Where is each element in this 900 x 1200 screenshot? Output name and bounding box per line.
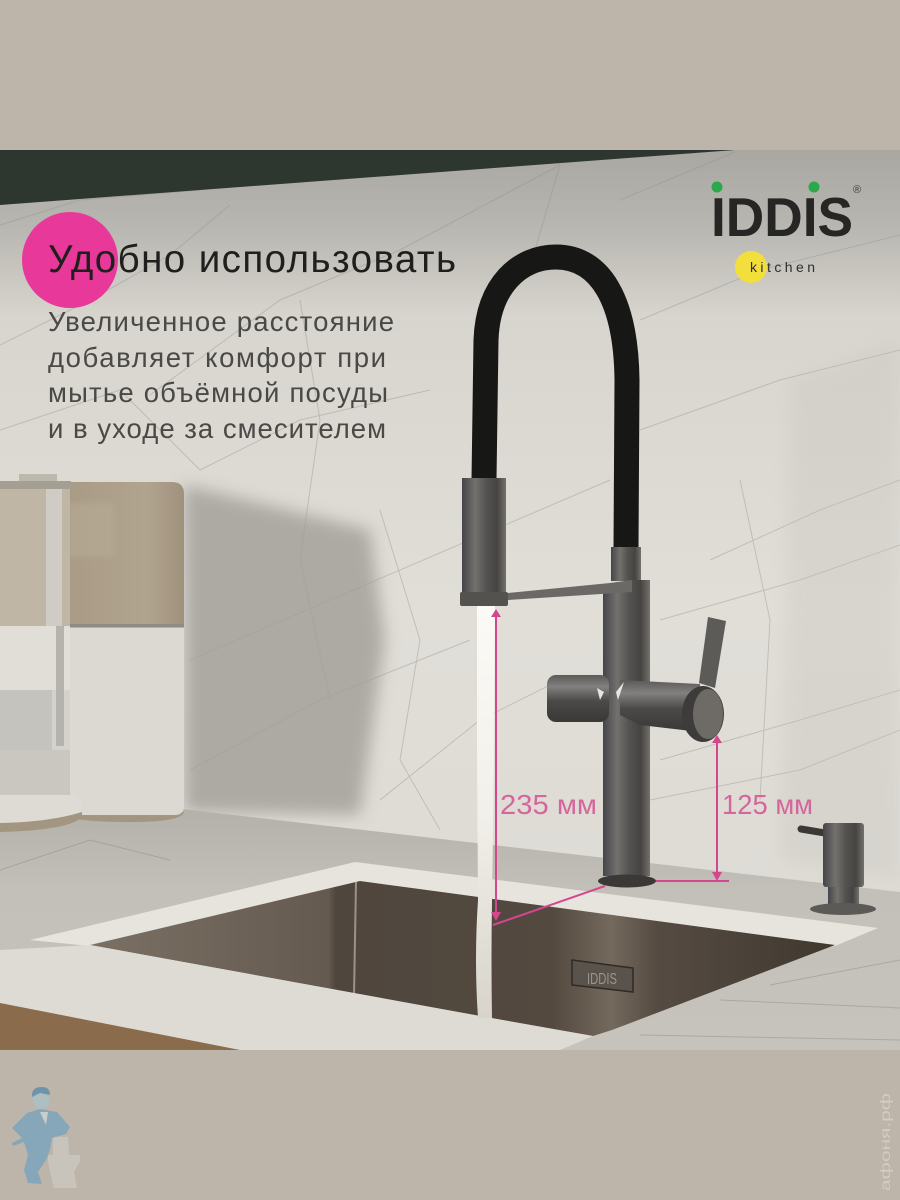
- dimension arrowheads: [491, 609, 722, 921]
- storage canister: [60, 482, 184, 822]
- label 125 mm: 125 мм: [722, 789, 813, 820]
- sink logo plate: [572, 960, 633, 992]
- title: Удобно использовать: [48, 238, 456, 281]
- logo: IDDIS kitchen: ®: [853, 184, 861, 196]
- plumber hat: [32, 1087, 50, 1097]
- toilet: [48, 1137, 80, 1188]
- dimension lines: [493, 615, 729, 925]
- body text: мытье объёмной посуды: [48, 377, 388, 408]
- cap face: [693, 689, 723, 739]
- body text: добавляет комфорт при: [48, 342, 386, 373]
- logo: IDDIS kitchen: kitchen: [750, 259, 815, 275]
- baseline 235: [493, 886, 605, 925]
- spray head: [462, 478, 506, 594]
- marble wall: [0, 150, 900, 910]
- marble veins: [0, 152, 900, 830]
- watermark: афоня.рф: [877, 1093, 893, 1191]
- lever: [699, 617, 726, 688]
- shirt: [40, 1112, 48, 1125]
- label 235 mm: 235 мм: [500, 789, 597, 820]
- faucet body: [603, 580, 650, 876]
- spray collar: [460, 592, 508, 606]
- wall shadow: [184, 485, 385, 815]
- plumber body: [12, 1109, 70, 1184]
- logo: IDDIS kitchen: [711, 182, 861, 283]
- left stub: [547, 675, 609, 722]
- 235 line: [495, 615, 497, 915]
- logo: IDDIS kitchen: IDDIS: [711, 186, 853, 248]
- mascot: plumber with toilet: [12, 1087, 80, 1188]
- baseline 125: [656, 880, 729, 882]
- plumber head: [33, 1093, 49, 1109]
- kitchen photo: [0, 150, 900, 1050]
- sink left corner line: [354, 882, 356, 996]
- water stream: [476, 606, 495, 1018]
- base flange: [598, 874, 656, 888]
- black hose: [484, 257, 627, 548]
- right handle barrel: [620, 680, 700, 732]
- highlights: [597, 682, 624, 700]
- spout arm: [508, 580, 632, 600]
- sink basin: [90, 881, 835, 1036]
- body text: [48, 306, 394, 444]
- soap dispenser: [801, 823, 876, 915]
- upper sleeve: [611, 547, 641, 581]
- body text: и в уходе за смесителем: [48, 413, 386, 444]
- faucet: [460, 257, 726, 888]
- body text: Увеличенное расстояние: [48, 306, 394, 337]
- wood cabinet front: [0, 1003, 240, 1050]
- countertop: [0, 788, 900, 1050]
- sink logo plate: IDDIS: [587, 971, 617, 988]
- water pitcher: [0, 474, 82, 832]
- cabinet: [0, 150, 735, 205]
- white sink lip: [30, 862, 878, 1000]
- front counter edge: [0, 945, 593, 1050]
- handle cap: [682, 686, 724, 742]
- wall soft shadow right: [796, 544, 888, 806]
- 125 line: [716, 742, 718, 875]
- pink accent circle: [22, 212, 118, 308]
- countertop veins: [0, 840, 900, 1040]
